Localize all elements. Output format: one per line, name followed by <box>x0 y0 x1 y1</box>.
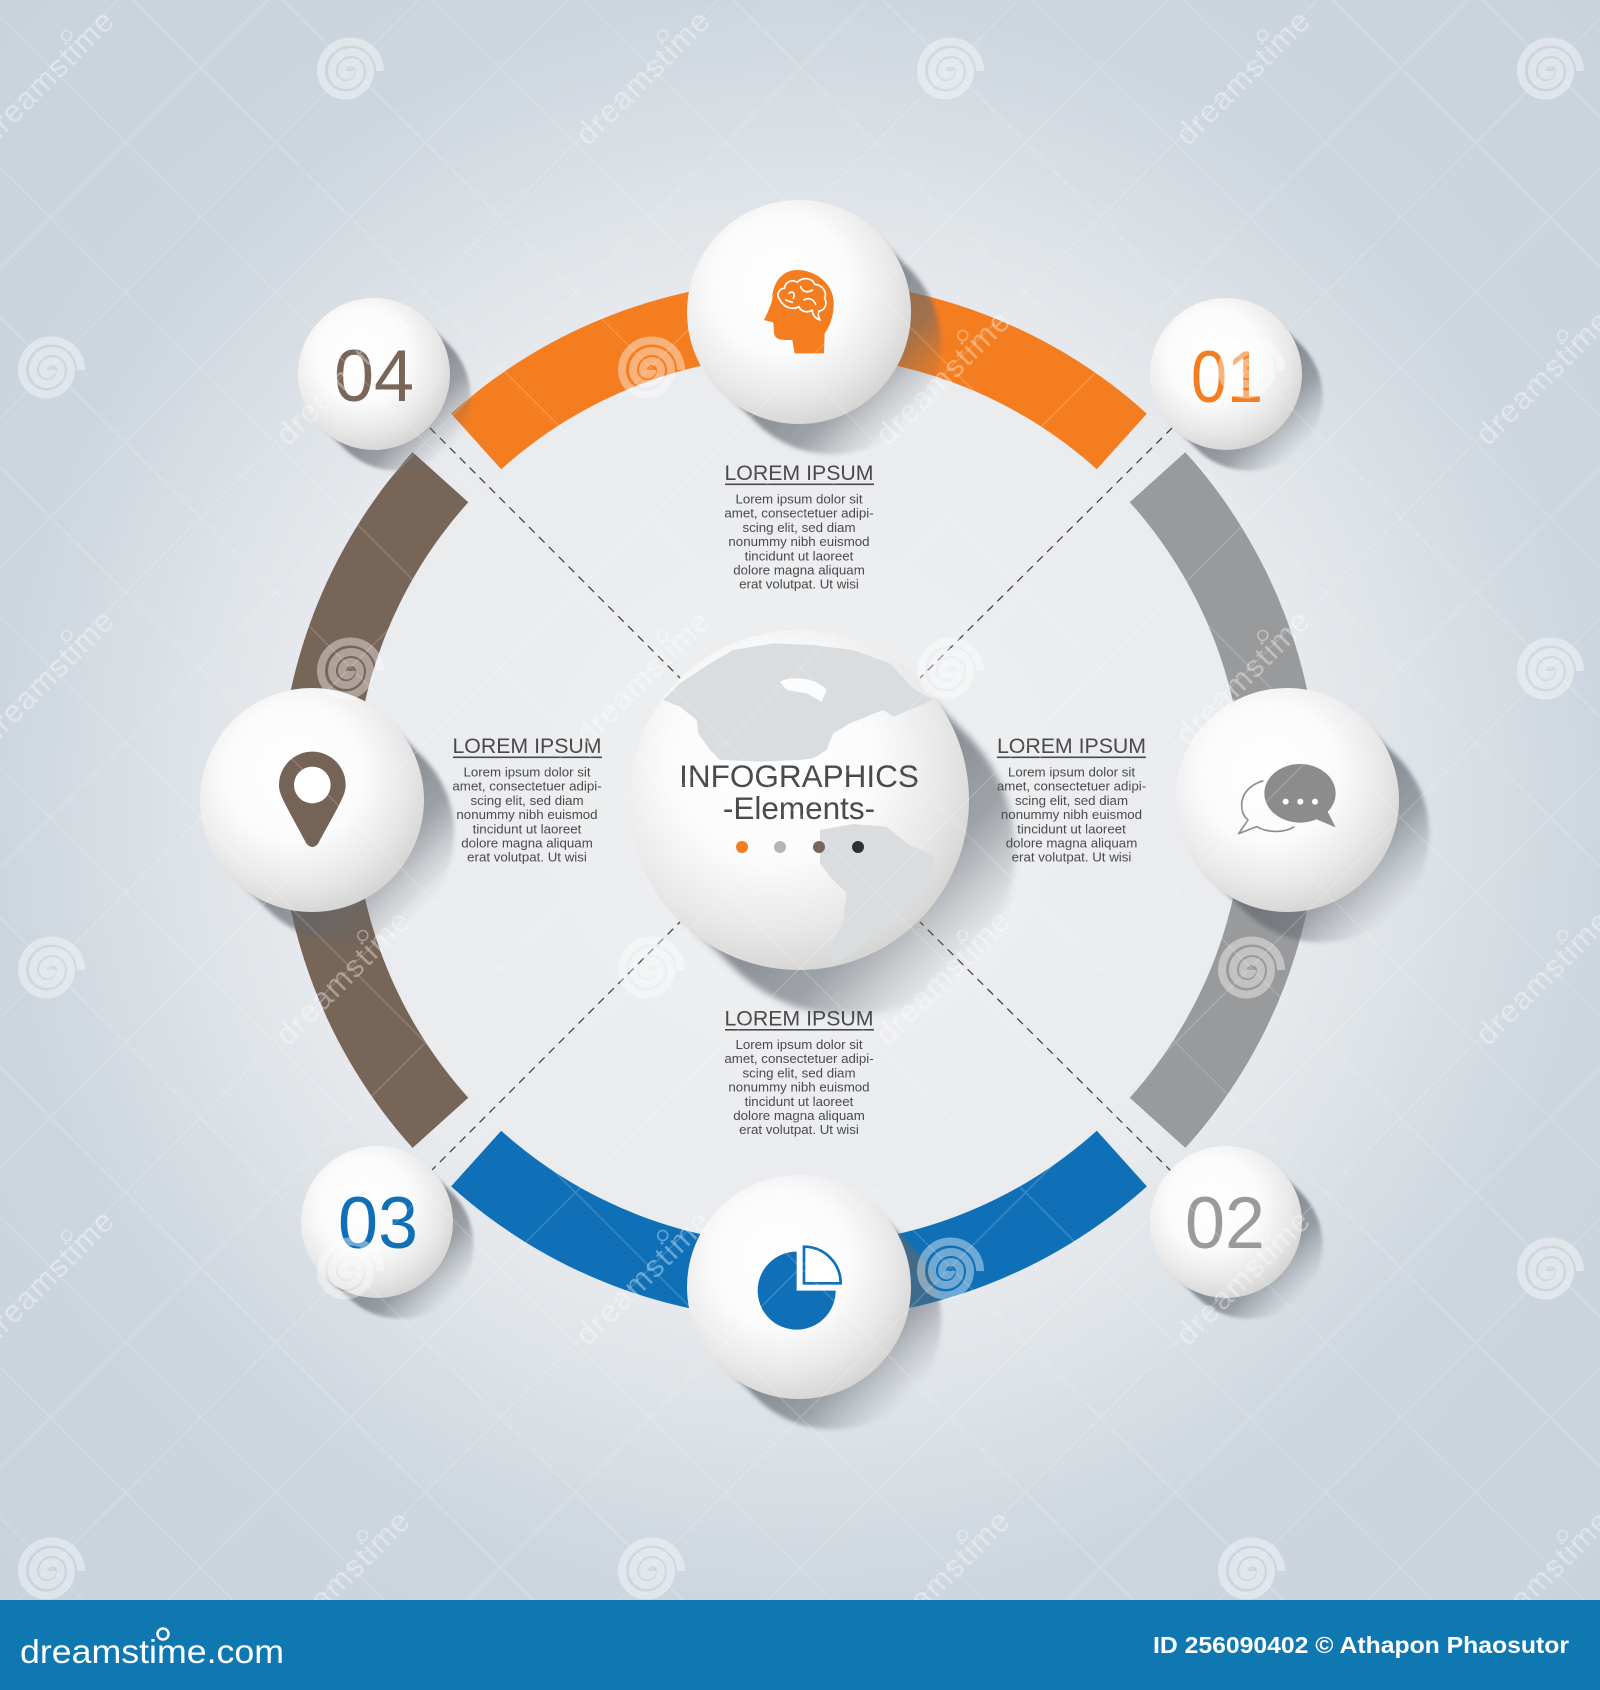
text block: bottom: LOREM IPSUM <box>724 1006 874 1030</box>
watermark overlay: dreamstime <box>268 1503 417 1652</box>
watermark overlay: dreamstime <box>868 303 1017 452</box>
text block: bottom: Lorem ipsum dolor sit <box>735 1037 863 1052</box>
text block: bottom: scing elit, sed diam <box>742 1065 856 1080</box>
watermark overlay: dreamstime <box>568 603 717 752</box>
text block: right: nonummy nibh euismod <box>1001 807 1142 822</box>
sphere: 04 <box>298 298 450 450</box>
text block: top: LOREM IPSUM <box>724 461 874 485</box>
watermark overlay: dreamstime <box>868 903 1017 1052</box>
text block: right: LOREM IPSUM <box>997 734 1146 758</box>
globe colour dots <box>736 841 864 853</box>
text block: top: nonummy nibh euismod <box>728 534 870 549</box>
ring segment: orange top <box>451 280 1147 469</box>
globe continents <box>663 643 935 963</box>
sphere: 02: 02 <box>1185 1183 1265 1264</box>
sphere: right with speech bubbles icon <box>1175 688 1399 912</box>
text block: left: Lorem ipsum dolor sit <box>463 764 591 780</box>
text block: right <box>997 734 1146 865</box>
sphere: 02 <box>1150 1146 1302 1298</box>
watermark overlay: dreamstime <box>268 903 417 1052</box>
sphere: 03: 03 <box>338 1183 418 1264</box>
text block: left: nonummy nibh euismod <box>456 807 598 822</box>
ring segment: gray right <box>1130 452 1319 1148</box>
text block: right: scing elit, sed diam <box>1015 793 1128 808</box>
footer bar: dreamstime.com <box>20 1633 284 1670</box>
footer bar <box>0 1600 1600 1690</box>
footer bar: ID 256090402 © Athapon Phaosutor <box>1153 1632 1569 1658</box>
text block: left: LOREM IPSUM <box>452 734 602 758</box>
globe title: INFOGRAPHICS <box>679 758 919 794</box>
globe title <box>679 758 919 826</box>
text block: right: amet, consectetuer adipi- <box>997 779 1146 794</box>
central globe <box>629 630 969 970</box>
watermark overlay: dreamstime <box>268 303 417 452</box>
watermark overlay: dreamstime <box>568 3 717 152</box>
text block: bottom: amet, consectetuer adipi- <box>724 1051 874 1066</box>
sphere: 01 <box>1150 298 1302 450</box>
sphere: top with brain icon <box>687 200 911 424</box>
text block: right: Lorem ipsum dolor sit <box>1008 764 1135 780</box>
watermark overlay: dreamstime <box>1168 603 1317 752</box>
text block: right: dolore magna aliquam <box>1006 836 1137 850</box>
text block: left <box>452 734 602 865</box>
text block: right: erat volutpat. Ut wisi <box>1012 850 1131 865</box>
ring segment: blue bottom <box>451 1131 1147 1320</box>
text block: top: tincidunt ut laoreet <box>745 548 854 563</box>
text block: bottom: nonummy nibh euismod <box>728 1080 870 1095</box>
sphere: bottom with pie icon <box>687 1175 911 1399</box>
text block: bottom <box>724 1006 874 1137</box>
text block: top: dolore magna aliquam <box>733 562 865 578</box>
text block: top: scing elit, sed diam <box>742 520 856 535</box>
text block: top <box>724 461 874 592</box>
text block: left: dolore magna aliquam <box>461 836 593 850</box>
text block: bottom: dolore magna aliquam <box>733 1108 865 1123</box>
sphere: left with map pin icon <box>200 688 424 912</box>
text block: right: tincidunt ut laoreet <box>1017 821 1126 836</box>
globe title: -Elements- <box>723 790 875 826</box>
text block: bottom: erat volutpat. Ut wisi <box>739 1122 859 1137</box>
watermark overlay: dreamstime <box>868 1503 1017 1652</box>
dashed diagonal dividers <box>430 428 1172 1172</box>
ring segment: brown left <box>279 452 468 1148</box>
text block: bottom: tincidunt ut laoreet <box>745 1094 854 1109</box>
watermark overlay: dreamstime <box>1168 1203 1317 1352</box>
text block: left: tincidunt ut laoreet <box>473 821 582 836</box>
text block: left: erat volutpat. Ut wisi <box>467 850 587 865</box>
sphere: 04: 04 <box>334 336 414 417</box>
text block: top: amet, consectetuer adipi- <box>724 506 874 521</box>
text block: left: scing elit, sed diam <box>470 793 584 808</box>
text block: top: Lorem ipsum dolor sit <box>735 492 863 506</box>
sphere: 01: 01 <box>1191 337 1263 418</box>
text block: left: amet, consectetuer adipi- <box>452 779 602 794</box>
sphere: 03 <box>301 1146 453 1298</box>
text block: top: erat volutpat. Ut wisi <box>739 577 859 592</box>
watermark overlay: dreamstime <box>1168 3 1317 152</box>
watermark overlay: dreamstime <box>568 1203 717 1352</box>
